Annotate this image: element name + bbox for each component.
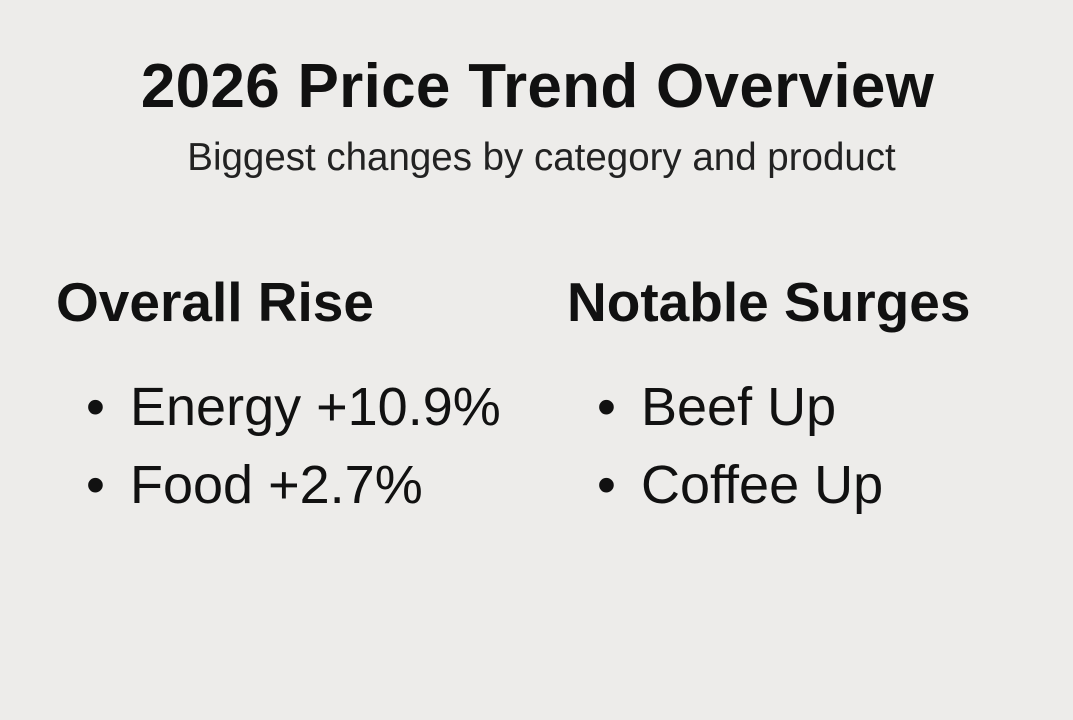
- panel: notable surges: [567, 271, 970, 515]
- panel: overall rise: [56, 271, 501, 515]
- subtitle: Biggest changes by category and product: [187, 136, 896, 179]
- list: notable surges: •: [597, 377, 616, 437]
- list: overall rise: Energy +10.9%: [130, 377, 501, 437]
- list: overall rise: •: [86, 455, 105, 515]
- list: notable surges: •: [597, 455, 616, 515]
- list: overall rise: •: [86, 377, 105, 437]
- list: notable surges: Beef Up: [641, 377, 836, 437]
- heading: overall rise: Overall Rise: [56, 271, 374, 333]
- list: overall rise: Food +2.7%: [130, 455, 423, 515]
- list: overall rise: [86, 377, 501, 515]
- list: notable surges: [597, 377, 883, 515]
- heading: notable surges: Notable Surges: [567, 271, 970, 333]
- title: 2026 Price Trend Overview: [141, 52, 934, 121]
- list: notable surges: Coffee Up: [641, 455, 883, 515]
